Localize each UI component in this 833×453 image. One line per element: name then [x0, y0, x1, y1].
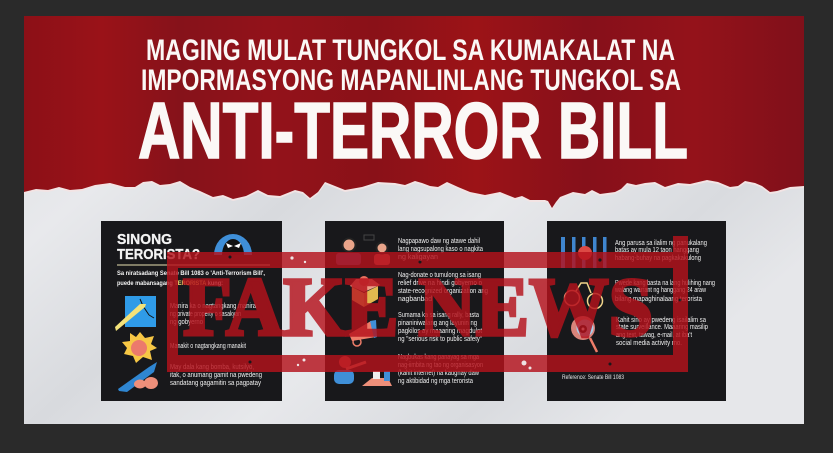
text: pag-aresto: walang warrant ng hanggang 24 araw — [614, 287, 707, 294]
text: armas — [170, 364, 262, 387]
title: MAGING MULAT TUNGKOL SA KUMAKALAT NA — [146, 34, 675, 67]
text: parusa: Ang parusa sa ilalim ng panukalang — [615, 240, 707, 247]
text: pag-aresto — [614, 280, 715, 303]
text: donasyon: state-recognized organization ang — [398, 288, 488, 295]
panel: mga parusa — [547, 221, 726, 401]
reference note: Reference: Senate Bill 1083 — [562, 375, 625, 381]
text: surveillance: Kahit sino ay pwedeng isailalim sa — [616, 317, 706, 324]
text: manakit: Manakit o nagtangkang manakit — [170, 343, 246, 350]
text: internet — [398, 354, 483, 385]
text: surveillance: social media activity mo. — [616, 340, 682, 347]
text: surveillance: ang text, tawag, e-mail, at iba't — [616, 332, 692, 339]
intro text: puede mabansagang TERORISTA kung: — [117, 280, 223, 287]
stamp: fake news: FAKE NEWS — [183, 261, 653, 354]
torn red header banner — [24, 16, 804, 210]
text: donasyon — [398, 272, 488, 303]
text: paratang: lang nagsupalong kaso o nagkita — [398, 246, 483, 253]
text: paratang: Nagpapawo daw ng atawe dahil — [398, 238, 480, 245]
icon: donation box — [350, 276, 380, 307]
icon: prison bars — [561, 237, 606, 268]
icon: megaphone — [349, 320, 377, 346]
text: donasyon: Nag-donate o tumulong sa isang — [398, 272, 481, 279]
text: parusa: batas ay mula 12 taon hanggang — [615, 247, 699, 254]
icon: two people talking — [336, 235, 390, 265]
text: armas: sandatang gagamitin sa pagpatay — [170, 380, 261, 387]
intro text — [117, 270, 265, 287]
text: internet: ng aktibidad ng mga terorista — [398, 378, 473, 385]
text: parusa: habang-buhay na pagkakakulong — [615, 255, 701, 262]
text: manira: ng private property o sasakyan — [170, 311, 241, 318]
text: rally: pinaniniwalang ang layunin ng — [398, 320, 477, 327]
title: IMPORMASYONG MAPANLINLANG TUNGKOL SA — [141, 64, 681, 97]
heading: sinong terorista — [117, 232, 200, 263]
text: paratang — [398, 238, 483, 261]
text: armas: itak, o anumang gamit na pwedeng — [170, 372, 262, 379]
stamp: fake news — [167, 236, 688, 372]
text: internet: (kahit internet) na kaugnay daw — [398, 370, 480, 377]
icon: magnifying glass with eye — [571, 316, 597, 352]
text: pag-aresto: bilang mapaghinalaang terorista — [615, 296, 702, 303]
text: rally: Sumama ka sa isang rally, basta — [398, 312, 479, 319]
text: parusa — [615, 240, 707, 262]
heading: sinong terorista: TERORISTA? — [117, 247, 200, 263]
text: manira: ng gobyerno — [170, 319, 203, 326]
icon: bat through window — [115, 296, 156, 331]
text: donasyon: relief drive na hindi gobyerno o — [398, 280, 482, 287]
icon: person with phone and tablet — [334, 356, 392, 386]
text: pag-aresto: Pwede kang basta na lang hulihing nang — [615, 280, 715, 287]
icon: explosion — [122, 332, 157, 363]
text: manira: Manira ka o nagtangkang manira — [170, 303, 256, 310]
text: armas: May dala kang bomba, kutsilyo, — [170, 364, 254, 371]
icon: handcuffs — [564, 283, 602, 308]
intro text: Sa niratsadang Senate Bill 1083 o 'Anti-Terrorism Bill', — [117, 270, 265, 277]
text: paratang: ng kaligayan — [398, 254, 438, 261]
text: internet: nag-iimbita ng tao ng organisasyon — [398, 362, 483, 369]
text: surveillance: state surveillance. Maaaring masilip — [616, 324, 708, 331]
text: donasyon: nagbanbad — [398, 296, 432, 303]
panel: mga halimbawa — [325, 221, 504, 401]
text: surveillance — [616, 317, 708, 347]
text: manira — [170, 303, 256, 326]
panel: sinong terorista — [101, 221, 282, 401]
icon: masked figure — [214, 234, 252, 255]
decorative ink specks — [290, 256, 532, 370]
text: rally: ng "serious risk to public safety" — [398, 336, 482, 343]
icon: knife — [118, 362, 158, 392]
heading: sinong terorista: SINONG — [117, 232, 172, 248]
text: internet: Nagbukas kang panayag sa mga — [398, 354, 479, 361]
title — [138, 34, 688, 175]
text: rally — [398, 312, 482, 343]
text: rally: pagkilos ay maaaring magdulot — [398, 328, 482, 335]
